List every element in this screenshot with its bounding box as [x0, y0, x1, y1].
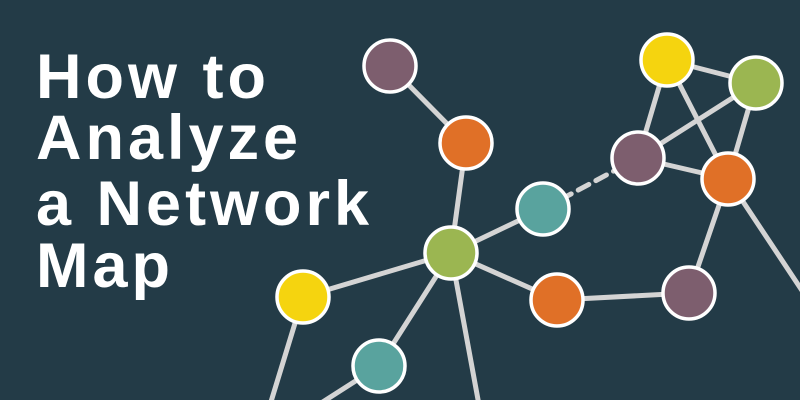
node: purple top	[364, 40, 416, 92]
title: How to	[36, 42, 270, 112]
title: Analyze	[36, 103, 302, 173]
node: yellow left	[277, 271, 329, 323]
node: yellow cluster	[641, 34, 693, 86]
node: teal mid	[517, 183, 569, 235]
node: purple bottom right	[663, 267, 715, 319]
node: orange upper	[440, 117, 492, 169]
node: orange bottom	[531, 274, 583, 326]
node: green cluster	[730, 57, 782, 109]
title: Map	[36, 231, 174, 301]
node: purple cluster	[612, 132, 664, 184]
title	[36, 42, 373, 301]
title: a Network	[36, 169, 373, 239]
node: teal bottom	[353, 340, 405, 392]
node: green hub	[425, 227, 477, 279]
node: orange cluster	[702, 153, 754, 205]
